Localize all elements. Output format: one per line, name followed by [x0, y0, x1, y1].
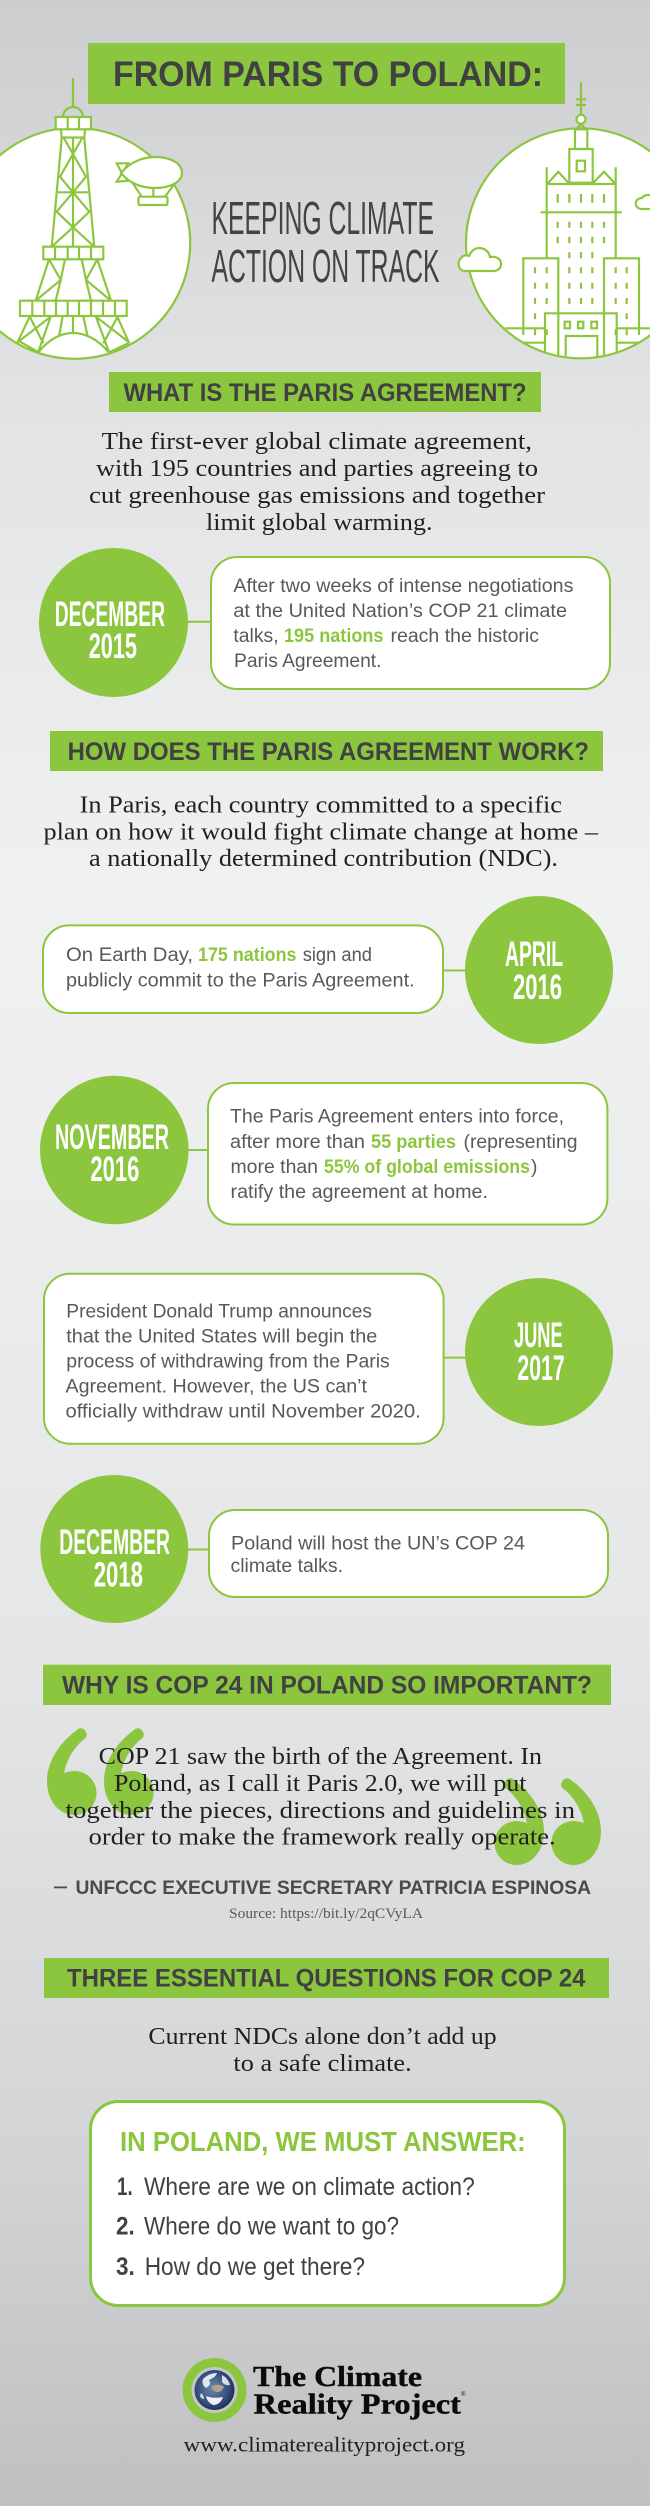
- card: December 2018: [209, 1510, 608, 1597]
- icon: closing quotation marks: [494, 1778, 601, 1865]
- card: April 2016: publicly commit to the Paris Agreement.: [66, 971, 415, 992]
- date circle: June 2017: JUNE: [514, 1316, 563, 1355]
- date circle: December 2018: 2018: [94, 1556, 143, 1594]
- logo: The Climate Reality Project: The Climate: [253, 2361, 422, 2393]
- date circle: November 2016: NOVEMBER: [55, 1118, 169, 1157]
- source note: Source: https://bit.ly/2qCVyLA: [229, 1906, 424, 1922]
- card: November 2016: 55 parties: [371, 1132, 456, 1153]
- logo: The Climate Reality Project: ®: [461, 2391, 466, 2398]
- logo: The Climate Reality Project: [182, 2358, 466, 2422]
- timeline: June 2017: [44, 1274, 613, 1444]
- illustration: Eiffel Tower in circle: [0, 78, 190, 359]
- subtitle: ACTION ON TRACK: [212, 240, 440, 292]
- date circle: April 2016: [465, 896, 613, 1044]
- date circle: December 2018: DECEMBER: [59, 1523, 170, 1562]
- icon: cloud left of palace: [459, 248, 501, 271]
- timeline: April 2016: [43, 896, 613, 1044]
- question 3: How do we get there?: [145, 2254, 365, 2281]
- icon: airship: [117, 157, 182, 205]
- card: April 2016: 175 nations: [198, 945, 296, 966]
- heading: three essential questions: THREE ESSENTIAL QUESTIONS FOR COP 24: [67, 1965, 586, 1993]
- text block: Paris Agreement definition: limit global warming.: [206, 509, 432, 536]
- card: November 2016: The Paris Agreement enters into force,: [230, 1106, 564, 1127]
- quote attribution: UNFCCC EXECUTIVE SECRETARY PATRICIA ESPINOSA: [76, 1877, 591, 1899]
- card: April 2016: [43, 925, 443, 1013]
- heading: three essential questions: [44, 1958, 609, 1998]
- text block: Paris Agreement definition: The first-ever global climate agreement,: [102, 428, 532, 455]
- date circle: December 2015: 2015: [89, 627, 137, 666]
- card: December 2015: at the United Nation’s COP 21 climate: [233, 601, 567, 622]
- timeline: November 2016: [40, 1076, 607, 1224]
- subtitle: [212, 192, 440, 292]
- text block: nationally determined contributions: a nationally determined contribution (NDC).: [89, 845, 558, 872]
- card: December 2015: Paris Agreement.: [234, 651, 382, 672]
- card: November 2016: after more than: [230, 1132, 365, 1153]
- panel: questions for Poland: [90, 2102, 564, 2306]
- card: June 2017: officially withdraw until November 2020.: [66, 1401, 421, 1422]
- date circle: December 2015: [39, 548, 188, 697]
- text block: quotation: order to make the framework really operate.: [89, 1824, 556, 1851]
- card: June 2017: that the United States will begin the: [66, 1326, 377, 1347]
- card: November 2016: ratify the agreement at home.: [230, 1182, 488, 1203]
- date circle: June 2017: [465, 1278, 613, 1426]
- text block: current NDCs: Current NDCs alone don’t add up: [148, 2023, 497, 2050]
- card: November 2016: more than: [230, 1157, 318, 1178]
- icon: opening quotation marks: [47, 1728, 154, 1815]
- card: December 2015: talks,: [233, 626, 279, 647]
- text block: quotation: together the pieces, directions and guidelines in: [66, 1797, 575, 1824]
- card: December 2018: climate talks.: [230, 1556, 343, 1577]
- card: December 2015: After two weeks of intense negotiations: [233, 576, 573, 597]
- question 1: Where are we on climate action?: [144, 2174, 475, 2201]
- heading: why is COP 24 in Poland so important: WHY IS COP 24 IN POLAND SO IMPORTANT?: [62, 1671, 592, 1699]
- logo: The Climate Reality Project: Reality Project: [254, 2388, 461, 2420]
- card: December 2015: 195 nations: [284, 626, 384, 647]
- card: June 2017: President Donald Trump announces: [66, 1301, 372, 1322]
- heading: why is COP 24 in Poland so important: [43, 1665, 611, 1705]
- icon: cloud right of palace: [636, 195, 650, 209]
- text block: current NDCs: to a safe climate.: [233, 2050, 412, 2077]
- heading: what is the Paris Agreement: WHAT IS THE PARIS AGREEMENT?: [124, 379, 526, 407]
- date circle: December 2018: [40, 1475, 188, 1623]
- question 2: Where do we want to go?: [144, 2213, 399, 2240]
- heading: how does the Paris Agreement work: [50, 731, 603, 771]
- text block: quotation: [66, 1743, 575, 1851]
- text block: Paris Agreement definition: [89, 428, 545, 536]
- question 1: 1.: [117, 2174, 133, 2201]
- card: June 2017: [44, 1274, 444, 1444]
- card: November 2016: ): [531, 1157, 537, 1178]
- date circle: November 2016: [40, 1076, 189, 1224]
- text block: quotation: COP 21 saw the birth of the Agreement. In: [99, 1743, 542, 1770]
- date circle: April 2016: APRIL: [505, 935, 563, 974]
- card: November 2016: 55% of global emissions: [324, 1157, 530, 1178]
- text block: nationally determined contributions: In Paris, each country committed to a specific: [80, 792, 562, 819]
- title banner: [88, 43, 565, 104]
- text block: Paris Agreement definition: with 195 countries and parties agreeing to: [96, 455, 538, 482]
- icon: earth in green ring: [182, 2358, 246, 2422]
- date circle: June 2017: 2017: [517, 1349, 565, 1388]
- text block: nationally determined contributions: [44, 792, 599, 872]
- heading: how does the Paris Agreement work: HOW DOES THE PARIS AGREEMENT WORK?: [68, 738, 589, 766]
- card: April 2016: sign and: [303, 945, 372, 966]
- card: December 2015: [211, 557, 610, 689]
- date circle: December 2015: DECEMBER: [55, 595, 165, 634]
- title banner: FROM PARIS TO POLAND:: [113, 55, 543, 94]
- website URL: www.climaterealityproject.org: [184, 2433, 465, 2457]
- text block: nationally determined contributions: plan on how it would fight climate change at home –: [44, 818, 599, 846]
- card: June 2017: Agreement. However, the US can’t: [66, 1376, 368, 1397]
- card: December 2018: Poland will host the UN’s COP 24: [231, 1534, 525, 1554]
- card: November 2016: (representing: [464, 1132, 578, 1153]
- timeline: December 2015: [39, 548, 610, 697]
- card: April 2016: On Earth Day,: [66, 945, 193, 966]
- question 3: 3.: [116, 2254, 135, 2281]
- text block: current NDCs: [148, 2023, 497, 2077]
- heading: what is the Paris Agreement: [109, 372, 541, 412]
- text block: Paris Agreement definition: cut greenhouse gas emissions and together: [89, 482, 545, 509]
- card: June 2017: process of withdrawing from the Paris: [66, 1351, 390, 1372]
- question 2: 2.: [116, 2213, 135, 2240]
- subtitle: KEEPING CLIMATE: [212, 192, 434, 244]
- card: December 2015: reach the historic: [390, 626, 539, 647]
- card: November 2016: [208, 1083, 607, 1224]
- timeline: December 2018: [40, 1475, 608, 1623]
- text block: quotation: Poland, as I call it Paris 2.0, we will put: [114, 1770, 527, 1797]
- date circle: April 2016: 2016: [513, 968, 562, 1007]
- illustration: Warsaw Palace of Culture in circle: [466, 82, 650, 360]
- date circle: November 2016: 2016: [90, 1150, 139, 1189]
- panel heading: IN POLAND, WE MUST ANSWER:: [120, 2126, 526, 2157]
